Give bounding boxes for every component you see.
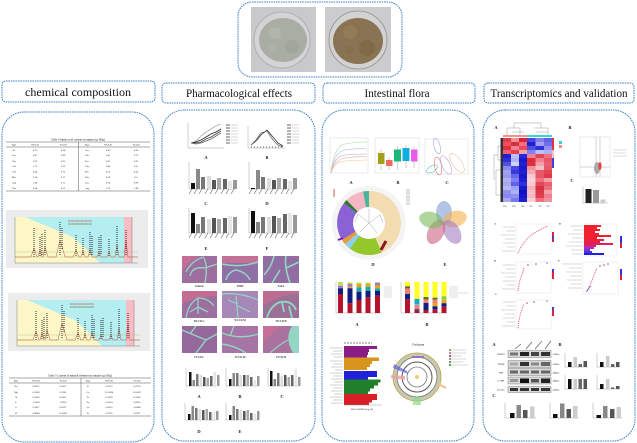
micrograph: YCCD-H bbox=[263, 326, 299, 359]
table: amino acid content: 1.71 bbox=[61, 182, 66, 184]
chart: LEfSe LDA bars: LDA SCORE (log 10) bbox=[351, 408, 373, 411]
table: mineral elements: 0.0026 bbox=[33, 396, 40, 399]
table: mineral elements: YCCD bbox=[60, 380, 67, 382]
micrograph: WCCD-H bbox=[263, 291, 299, 323]
chart C: DEG bars: C bbox=[570, 178, 574, 183]
heading: intestinal flora: Intestinal flora bbox=[364, 86, 430, 100]
chart A: clustered heatmap bbox=[494, 123, 562, 208]
micrograph: WCCD-M: WCCD-M bbox=[234, 319, 246, 322]
table: amino acid content: 0.3 bbox=[134, 176, 138, 179]
table: mineral elements: 0.0037 bbox=[60, 396, 67, 399]
chart D: cytokine bars: D bbox=[197, 429, 201, 434]
chart B: GO bar plot bbox=[559, 222, 622, 256]
panel: chemical composition bbox=[2, 112, 154, 442]
table: mineral elements: 0.0024 bbox=[106, 401, 113, 404]
chart A: clustered heatmap: W3 bbox=[521, 205, 526, 208]
table: amino acid content: 0.74 bbox=[106, 182, 111, 184]
table: amino acid content: 2.32 bbox=[61, 165, 66, 168]
chart A: phylum stacked bars bbox=[336, 282, 392, 327]
heading: pharmacological effects bbox=[162, 83, 315, 103]
figure A: western blots: 42kDa bbox=[553, 388, 560, 392]
table: amino acid content: 0.22 bbox=[33, 160, 38, 163]
table: amino acid content: Asp bbox=[12, 182, 17, 184]
chart A: cytokine bars bbox=[186, 368, 220, 399]
table: amino acid content: 1.46 bbox=[33, 182, 38, 184]
table: mineral elements: 0.5617 bbox=[33, 406, 40, 409]
chart C: PCoA ellipses: C bbox=[445, 180, 449, 185]
chart E: enrichment dot plot bbox=[495, 293, 554, 329]
table: amino acid content: 0.62 bbox=[134, 170, 139, 174]
chart A: clustered heatmap: W1 bbox=[503, 205, 508, 208]
table: amino acid content: Table 4 Amino acid content in samples (g/100g) bbox=[51, 138, 105, 142]
chart A: rarefaction curves bbox=[330, 138, 368, 185]
table: amino acid content: 0.99 bbox=[61, 154, 66, 157]
chart B: alpha diversity boxplot: B bbox=[396, 180, 400, 185]
heading: transcriptomics and validation: Transcriptomics and validation bbox=[490, 86, 628, 100]
table: mineral elements: Type bbox=[14, 380, 19, 382]
table: amino acid content: Met bbox=[12, 176, 16, 179]
table: amino acid content: 2.91 bbox=[134, 160, 139, 163]
chart D: bars bbox=[249, 162, 297, 206]
table: amino acid content: 3.44 bbox=[106, 165, 111, 168]
micrograph: WCCD-L: WCCD-L bbox=[194, 320, 205, 323]
micrograph: 5ASA: 5ASA bbox=[278, 285, 284, 288]
table: mineral elements: Na bbox=[15, 385, 18, 388]
chart D: enrichment dot plot: E bbox=[558, 260, 560, 262]
table: mineral elements: 51.6288 bbox=[105, 391, 114, 394]
micrograph: Control: Control bbox=[195, 285, 204, 288]
table: amino acid content: 0.47 bbox=[106, 149, 111, 152]
table: mineral elements: YCCD bbox=[134, 380, 141, 382]
table: mineral elements: 0.0048 bbox=[134, 406, 141, 409]
table: mineral elements: 0.2569 bbox=[33, 391, 40, 394]
table: amino acid content: 0.17 bbox=[61, 176, 66, 179]
table: amino acid content: Ile bbox=[13, 149, 16, 152]
panel: transcriptomics and validation bbox=[483, 110, 635, 441]
table: amino acid content: 0.46 bbox=[33, 187, 38, 190]
chart D: bars: D bbox=[265, 201, 269, 206]
table: amino acid content: Arg bbox=[85, 187, 90, 190]
chart C: PCoA ellipses bbox=[425, 137, 468, 185]
micrograph: YCCD-L bbox=[182, 326, 217, 359]
table: mineral elements: 0.0125 bbox=[106, 412, 113, 415]
panel: intestinal flora bbox=[322, 110, 474, 441]
chart E: enrichment dot plot: C bbox=[495, 293, 497, 296]
chart B: disease activity lines: B bbox=[265, 155, 269, 160]
table: mineral elements: 0.0052 bbox=[106, 406, 113, 409]
table: mineral elements: 0.3059 bbox=[106, 396, 113, 399]
chart B: GO bar plot: B bbox=[559, 222, 561, 226]
chart C: cytokine bars: C bbox=[280, 394, 284, 399]
table: amino acid content: 1.89 bbox=[134, 187, 139, 190]
table: amino acid content: 1.52 bbox=[106, 187, 111, 190]
figure A: western blots: 37kDa bbox=[553, 353, 560, 356]
table: mineral elements: 0.0378 bbox=[134, 385, 141, 388]
micrograph: WCCD-L bbox=[182, 291, 217, 323]
table: amino acid content: 0.64 bbox=[33, 170, 38, 174]
table: amino acid content: Gly bbox=[85, 165, 90, 168]
chart D: cytokine bars bbox=[185, 403, 218, 434]
table: mineral elements: 0.0137 bbox=[134, 412, 141, 415]
figure A: western blots: A bbox=[492, 342, 496, 347]
table: amino acid content: 0.52 bbox=[106, 170, 111, 174]
chart B: alpha diversity boxplot bbox=[375, 138, 419, 185]
table: mineral elements: WCCD bbox=[105, 380, 113, 382]
micrograph: Control bbox=[182, 256, 217, 288]
photo: brown powder sample bbox=[325, 7, 391, 72]
chart B: cytokine bars bbox=[226, 368, 260, 399]
table: mineral elements: Al bbox=[15, 396, 18, 399]
micrograph: YCCD-H: YCCD-H bbox=[276, 356, 286, 359]
table: amino acid content: 0.99 bbox=[134, 182, 139, 184]
table: mineral elements: Mg bbox=[14, 391, 18, 394]
heading: chemical composition bbox=[2, 81, 155, 102]
table: mineral elements: Cl bbox=[15, 412, 17, 415]
figure A: western blots: 50kDa bbox=[553, 363, 560, 366]
figure A: western blots: 46kDa bbox=[553, 380, 560, 382]
chart: cladogram: Cladogram bbox=[412, 344, 425, 346]
table: amino acid content: YCCD bbox=[60, 144, 67, 146]
figure A: western blots: TXNIP bbox=[497, 363, 505, 366]
table: mineral elements: Sr bbox=[87, 412, 89, 415]
table: amino acid content: 3.21 bbox=[134, 165, 139, 168]
table: amino acid content: WCCD bbox=[104, 144, 112, 146]
heading: chemical composition: chemical composition bbox=[25, 85, 131, 99]
chart A: cytokine bars: A bbox=[197, 394, 201, 399]
heading: transcriptomics and validation bbox=[484, 83, 634, 103]
chart A: phylum stacked bars: A bbox=[355, 322, 359, 327]
table: mineral elements: Type bbox=[86, 380, 91, 382]
table: amino acid content: 0.25 bbox=[61, 160, 66, 163]
panel: sample photos bbox=[238, 2, 402, 77]
table: amino acid content: Tyr bbox=[12, 160, 16, 163]
table: amino acid content: Thr bbox=[12, 187, 16, 190]
chart A: clustered heatmap: A bbox=[494, 125, 498, 130]
table: amino acid content: Ser bbox=[85, 149, 89, 152]
chart B: genus stacked bars bbox=[401, 282, 468, 327]
chart A: body weight lines bbox=[188, 123, 238, 160]
chart F: bars bbox=[249, 208, 297, 251]
table: amino acid content: 0.29 bbox=[106, 176, 111, 179]
chart C: bars bbox=[189, 162, 237, 206]
table: amino acid content: 2.05 bbox=[106, 160, 111, 163]
table: amino acid content: 2.41 bbox=[106, 154, 111, 157]
chart A: KEGG dot plot: A bbox=[494, 222, 496, 226]
table: mineral elements: S bbox=[15, 406, 17, 409]
chart C: DEG bars bbox=[570, 178, 608, 203]
micrograph: TNBS bbox=[222, 256, 258, 288]
table: mineral elements: 0.6527 bbox=[60, 406, 67, 409]
chart B: disease activity lines bbox=[248, 125, 299, 160]
chart A: clustered heatmap: Y1 bbox=[529, 205, 533, 208]
table: amino acid content: 2.72 bbox=[134, 154, 139, 157]
table: amino acid content: Val bbox=[12, 170, 16, 174]
table: mineral elements bbox=[9, 374, 151, 416]
figure A: western blots: β-actin bbox=[498, 388, 505, 392]
table: amino acid content: Lys bbox=[85, 182, 89, 184]
table: amino acid content: 0.38 bbox=[61, 149, 66, 152]
table: amino acid content: 1.73 bbox=[33, 165, 38, 168]
chart B: genus stacked bars: B bbox=[425, 322, 429, 327]
chart E: bars bbox=[189, 208, 237, 251]
chart B: cytokine bars: B bbox=[238, 394, 242, 399]
chart C: enrichment dot plot: D bbox=[494, 260, 496, 262]
table: amino acid content: WCCD bbox=[31, 144, 39, 146]
micrograph: YCCD-L: YCCD-L bbox=[194, 356, 204, 359]
table: amino acid content bbox=[6, 138, 150, 191]
table: amino acid content: Pro bbox=[85, 160, 89, 163]
table: mineral elements: 0.2161 bbox=[60, 391, 67, 394]
table: mineral elements: 1.5056 bbox=[33, 401, 40, 404]
table: mineral elements: Fe bbox=[87, 396, 90, 399]
table: mineral elements: 1.5929 bbox=[60, 401, 67, 404]
table: mineral elements: Table 5 Content of mineral elements in samples (g/100g) bbox=[48, 374, 112, 378]
chart B: volcano plot: B bbox=[568, 125, 572, 130]
table: amino acid content: YCCD bbox=[133, 144, 140, 146]
table: mineral elements: 0.0057 bbox=[60, 385, 67, 388]
table: mineral elements: 0.0057 bbox=[33, 385, 40, 388]
figure A: western blots: 46kDa bbox=[553, 372, 560, 374]
chart E: cytokine bars bbox=[226, 403, 260, 434]
micrograph: 5ASA bbox=[263, 256, 299, 288]
chart E: cytokine bars: E bbox=[238, 429, 242, 434]
table: mineral elements: 9.4944 bbox=[33, 412, 40, 415]
chart: cladogram bbox=[391, 344, 468, 405]
figure A: western blots bbox=[492, 341, 560, 392]
chart C: cytokine bars bbox=[268, 368, 300, 399]
chart D: circular taxonomy ring: D bbox=[371, 262, 375, 267]
figure A: western blots: NLRP3 bbox=[497, 353, 506, 356]
table: amino acid content: 0.55 bbox=[61, 187, 66, 190]
photo: white powder sample bbox=[251, 7, 316, 72]
chart C: cytokine bars: C bbox=[492, 393, 496, 398]
chart C: bars: C bbox=[204, 201, 208, 206]
chart A: clustered heatmap: Y2 bbox=[538, 205, 542, 208]
table: amino acid content: 0.14 bbox=[33, 176, 38, 179]
heading: intestinal flora bbox=[323, 83, 475, 103]
micrograph: YCCD-M: YCCD-M bbox=[235, 356, 246, 359]
figure A: western blots: p-JNK bbox=[498, 380, 505, 382]
micrograph: WCCD-M bbox=[222, 291, 258, 322]
chart F: bars: F bbox=[266, 246, 269, 251]
chart A: body weight lines: A bbox=[204, 155, 208, 160]
panel: pharmacological effects bbox=[162, 110, 315, 441]
table: amino acid content: 0.63 bbox=[134, 149, 139, 152]
chart B: protein quantification bars bbox=[558, 342, 620, 389]
chart: LEfSe LDA bars bbox=[330, 343, 382, 411]
table: mineral elements: WCCD bbox=[32, 380, 40, 382]
table: mineral elements: Ca bbox=[87, 391, 90, 394]
table: mineral elements: 55.2457 bbox=[133, 391, 142, 394]
chart C: cytokine bars bbox=[492, 393, 622, 418]
table: amino acid content: Ala bbox=[12, 165, 17, 168]
table: mineral elements: Zn bbox=[87, 401, 90, 404]
heading: pharmacological effects: Pharmacological effects bbox=[186, 86, 292, 100]
chart B: protein quantification bars: B bbox=[558, 342, 562, 347]
table: mineral elements: 11.6282 bbox=[59, 412, 68, 415]
table: amino acid content: Type bbox=[12, 144, 17, 146]
table: amino acid content: His bbox=[85, 176, 89, 179]
table: mineral elements: 0.0372 bbox=[106, 385, 113, 388]
table: amino acid content: 0.72 bbox=[61, 170, 66, 174]
chart E: bars: E bbox=[204, 246, 208, 251]
table: amino acid content: Phe bbox=[85, 170, 90, 174]
chart D: circular taxonomy ring bbox=[332, 186, 408, 267]
table: amino acid content: 0.35 bbox=[33, 149, 38, 152]
micrograph: WCCD-H: WCCD-H bbox=[275, 320, 287, 323]
table: mineral elements: As bbox=[87, 406, 89, 409]
table: mineral elements: P bbox=[15, 401, 17, 404]
chart B: volcano plot bbox=[568, 125, 627, 177]
micrograph: TNBS: TNBS bbox=[237, 285, 244, 288]
chart E: Venn diagram bbox=[417, 201, 469, 267]
table: amino acid content: 0.87 bbox=[33, 154, 38, 157]
chart: chromatogram YCCD bbox=[8, 293, 150, 351]
table: mineral elements: K bbox=[87, 385, 89, 388]
figure A: western blots: JNK bbox=[499, 372, 503, 374]
table: amino acid content: Leu bbox=[12, 154, 17, 157]
table: amino acid content: Glu bbox=[85, 154, 90, 157]
chart A: KEGG dot plot bbox=[494, 222, 554, 254]
micrograph: YCCD-M bbox=[222, 326, 258, 359]
chart E: Venn diagram: E bbox=[443, 262, 447, 267]
chart A: clustered heatmap: W2 bbox=[512, 205, 517, 208]
chart A: clustered heatmap: Y3 bbox=[546, 205, 550, 208]
chart C: enrichment dot plot bbox=[494, 260, 554, 293]
chart D: enrichment dot plot bbox=[558, 260, 622, 294]
chart A: rarefaction curves: A bbox=[349, 180, 353, 185]
chart: chromatogram WCCD bbox=[6, 210, 148, 268]
table: mineral elements: 0.3165 bbox=[134, 396, 141, 399]
table: amino acid content: Type bbox=[85, 144, 90, 146]
table: mineral elements: 0.0031 bbox=[134, 401, 141, 404]
